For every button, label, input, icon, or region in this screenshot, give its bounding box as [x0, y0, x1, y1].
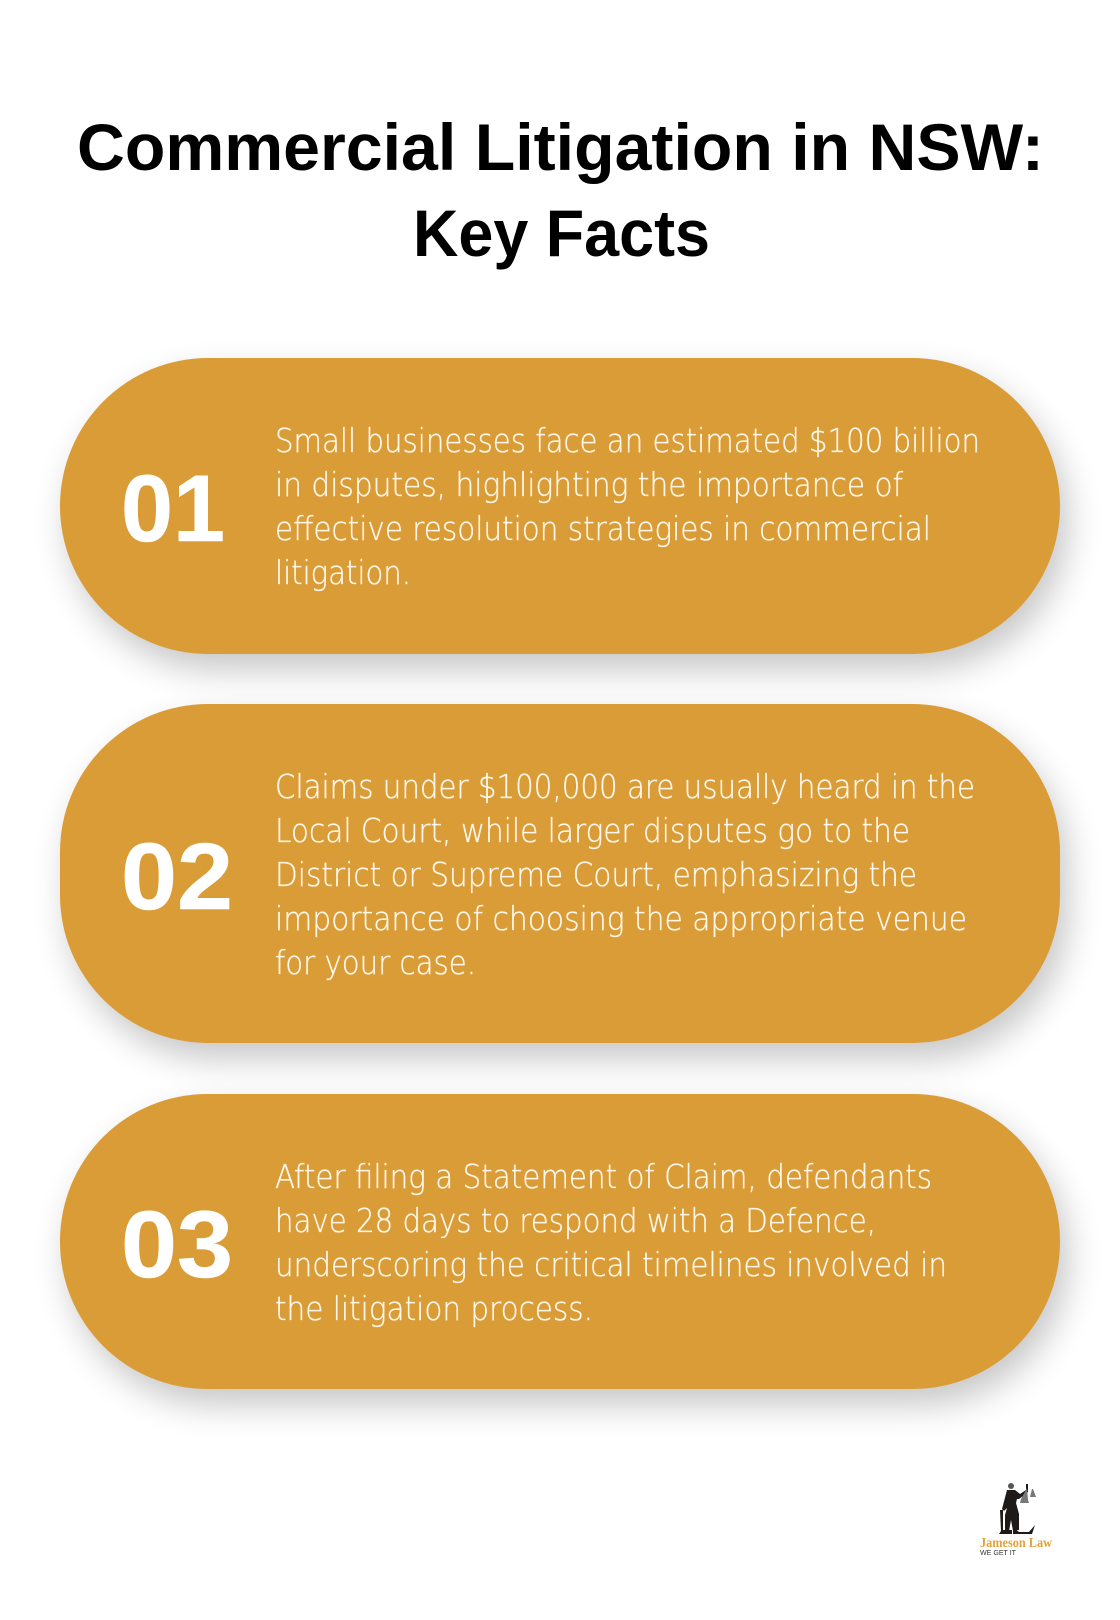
title	[77, 110, 1044, 270]
panel: fact 03: the litigation process.	[275, 1289, 593, 1328]
panel: fact 03	[60, 1094, 1068, 1405]
panel: fact 02: District or Supreme Court, emphasizing the	[275, 855, 917, 894]
panel: fact 03: have 28 days to respond with a Defence,	[275, 1201, 876, 1240]
logo: Jameson Law	[980, 1483, 1052, 1557]
panel: fact 02: importance of choosing the appropriate venue	[275, 899, 967, 938]
icon: lady justice figure	[999, 1483, 1036, 1534]
logo tagline: WE GET IT	[980, 1548, 1016, 1557]
panel: fact 01: in disputes, highlighting the importance of	[275, 465, 903, 504]
panel: fact 02: Claims under $100,000 are usually heard in the	[275, 767, 975, 806]
logo wordmark: Jameson Law	[980, 1535, 1052, 1550]
title: Commercial Litigation in NSW:	[77, 110, 1044, 184]
panel: fact 01: 01	[121, 456, 225, 562]
panel: fact 03: After filing a Statement of Claim, defendants	[275, 1157, 932, 1196]
panel: fact 02: for your case.	[275, 943, 476, 982]
panel: fact 01: Small businesses face an estimated $100 billion	[275, 421, 980, 460]
panel: fact 03: underscoring the critical timelines involved in	[275, 1245, 947, 1284]
panel: fact 01: litigation.	[275, 553, 411, 592]
panel: fact 02: 02	[121, 824, 233, 930]
panel: fact 01	[60, 358, 1068, 670]
panel: fact 03: 03	[121, 1192, 233, 1298]
panel: fact 02: Local Court, while larger disputes go to the	[275, 811, 910, 850]
panel: fact 02	[60, 704, 1068, 1059]
title: Key Facts	[413, 196, 710, 270]
panel: fact 01: effective resolution strategies in commercial	[275, 509, 931, 548]
